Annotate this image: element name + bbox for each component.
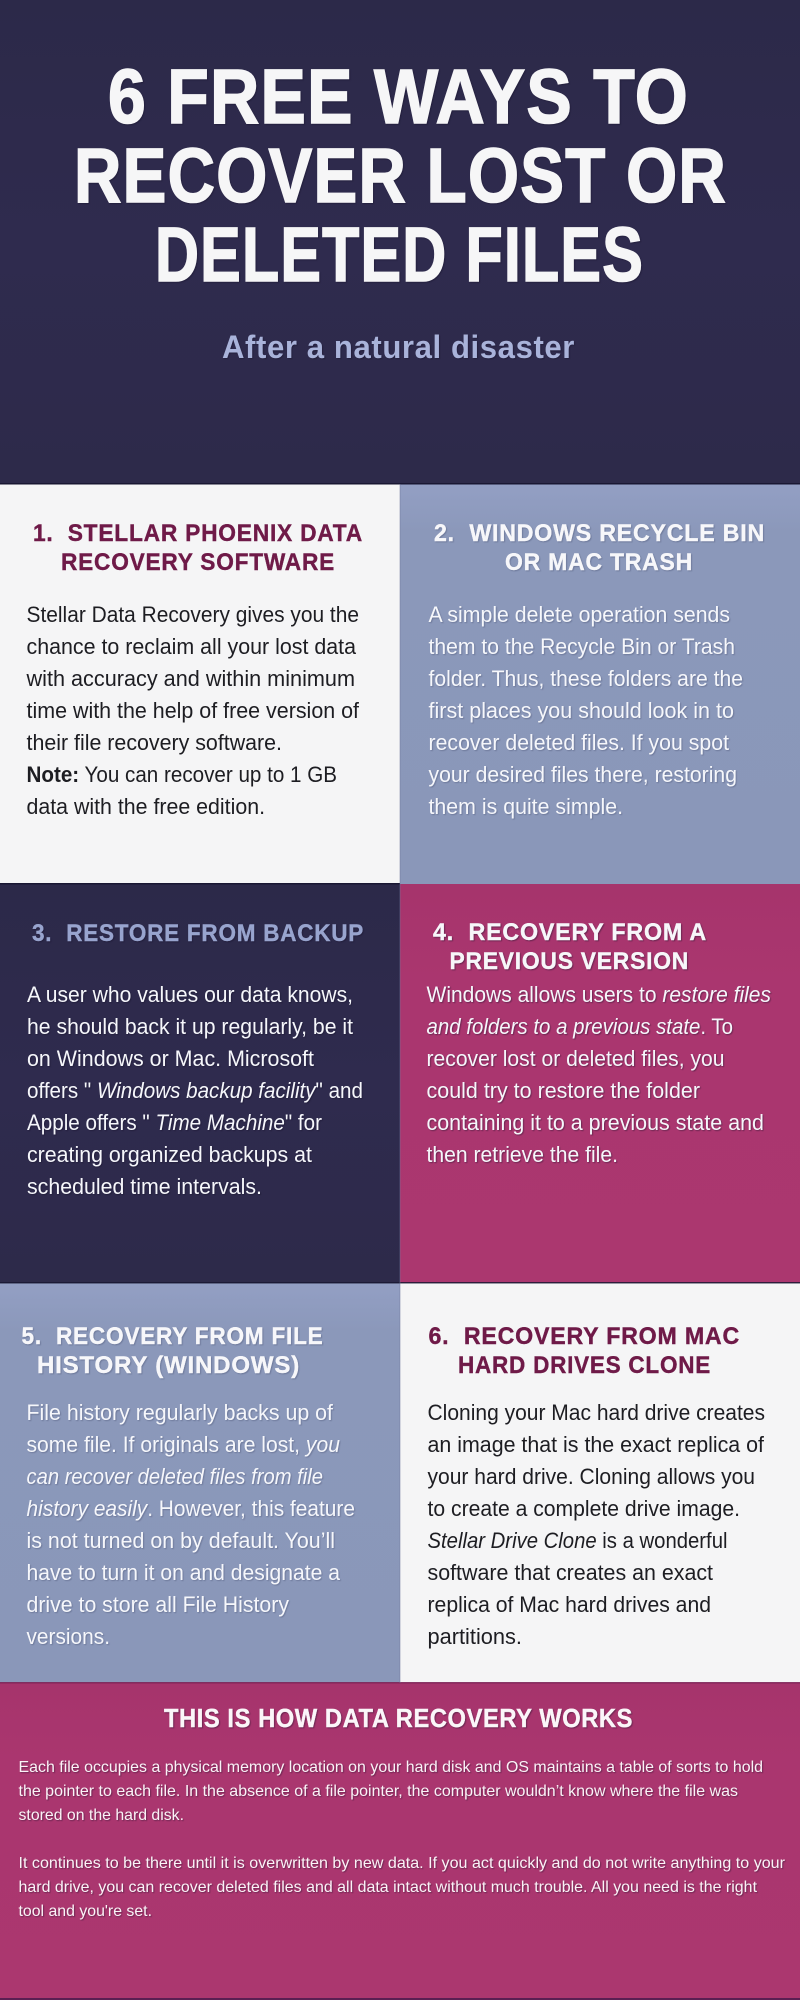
title: 6 FREE WAYS TO <box>108 54 689 140</box>
heading: 5 <box>22 1323 324 1379</box>
text: 5 body: history easily. However, this feature <box>26 1496 355 1521</box>
panel: how data recovery works <box>0 1683 800 2000</box>
heading: 6: HARD DRIVES CLONE <box>458 1352 711 1379</box>
heading: 4: PREVIOUS VERSION <box>450 948 689 975</box>
text: 6 body: an image that is the exact replica of <box>428 1432 765 1457</box>
text: 6 body <box>428 1400 765 1649</box>
text: 5 body: File history regularly backs up of <box>26 1400 334 1425</box>
heading: 6: 6. RECOVERY FROM MAC <box>428 1323 740 1350</box>
text: 6 body: partitions. <box>428 1624 522 1649</box>
text: 2 body: A simple delete operation sends <box>428 602 730 627</box>
heading: 3: 3. RESTORE FROM BACKUP <box>32 920 364 947</box>
heading: 5: 5. RECOVERY FROM FILE <box>22 1323 324 1350</box>
heading: 4: 4. RECOVERY FROM A <box>433 919 707 946</box>
text: 6 body: Cloning your Mac hard drive creates <box>428 1400 765 1425</box>
text: 5 body <box>26 1400 355 1649</box>
text: 1 body: Note: You can recover up to 1 GB <box>26 762 337 787</box>
heading: 2: 2. WINDOWS RECYCLE BIN <box>434 520 765 547</box>
text: 1 body: their file recovery software. <box>26 730 282 755</box>
text: 3 body: creating organized backups at <box>27 1142 312 1167</box>
text: 5 body: have to turn it on and designate a <box>26 1560 341 1585</box>
text: 2 body: recover deleted files. If you spot <box>428 730 729 755</box>
panel: 1 Stellar Phoenix <box>0 484 400 884</box>
panel: 2 Recycle Bin <box>400 484 800 884</box>
text: 2 body: your desired files there, restoring <box>428 762 737 787</box>
text: 5 body: is not turned on by default. You’ll <box>26 1528 335 1553</box>
text: 5 body: versions. <box>26 1624 110 1649</box>
heading: 1: 1. STELLAR PHOENIX DATA <box>33 520 363 547</box>
text: 3 body: offers " Windows backup facility" and <box>27 1078 363 1103</box>
text: 6 body: replica of Mac hard drives and <box>428 1592 711 1617</box>
text: 4 body: Windows allows users to restore files <box>426 982 771 1007</box>
panel: 5 File history <box>0 1283 400 1683</box>
text: 3 body: A user who values our data knows, <box>27 982 353 1007</box>
text: 6 body: software that creates an exact <box>428 1560 713 1585</box>
text: 4 body: could try to restore the folder <box>426 1078 700 1103</box>
text: 1 body: chance to reclaim all your lost data <box>26 634 357 659</box>
panel: 4 Previous version <box>400 884 800 1283</box>
text: 6 body: to create a complete drive image. <box>428 1496 740 1521</box>
text: 4 body: then retrieve the file. <box>426 1142 618 1167</box>
subtitle: After a natural disaster <box>222 329 575 365</box>
text: 1 body: Stellar Data Recovery gives you the <box>26 602 359 627</box>
text: 2 body: them to the Recycle Bin or Trash <box>428 634 735 659</box>
heading: 4 <box>433 919 707 975</box>
heading: 1: RECOVERY SOFTWARE <box>61 549 335 576</box>
text: paragraph 1: Each file occupies a physical memory location on your hard disk and OS maintains a table of sorts to hold <box>18 1759 763 1776</box>
text: 5 body: some file. If originals are lost, you <box>26 1432 340 1457</box>
text: 6 body: Stellar Drive Clone is a wonderful <box>428 1528 728 1553</box>
panel: 6 Mac clone <box>400 1283 800 1683</box>
text: 4 body: containing it to a previous state and <box>426 1110 764 1135</box>
text: 4 body: and folders to a previous state. To <box>426 1014 733 1039</box>
text: 6 body: your hard drive. Cloning allows you <box>428 1464 755 1489</box>
heading: 6 <box>428 1323 740 1379</box>
text: 1 body: with accuracy and within minimum <box>26 666 355 691</box>
text: 3 body <box>27 982 363 1199</box>
heading: 5: HISTORY (WINDOWS) <box>37 1352 300 1379</box>
heading: 2 <box>434 520 765 576</box>
title <box>74 54 727 298</box>
heading: 2: OR MAC TRASH <box>505 549 693 576</box>
text: paragraph 2: hard drive, you can recover deleted files and all data intact without much trouble. All you need is the right <box>18 1879 758 1896</box>
text: 5 body: drive to store all File History <box>26 1592 289 1617</box>
text: paragraph 1: the pointer to each file. In the absence of a file pointer, the computer wouldn’t know where the file was <box>18 1783 738 1800</box>
title: DELETED FILES <box>155 212 644 298</box>
text: 2 body <box>428 602 743 819</box>
text: 2 body: first places you should look in to <box>428 698 734 723</box>
text: paragraph 1 <box>18 1759 763 1824</box>
text: paragraph 2: tool and you're set. <box>18 1903 152 1920</box>
text: 2 body: them is quite simple. <box>428 794 623 819</box>
text: 3 body: he should back it up regularly, be it <box>27 1014 353 1039</box>
heading: 1 <box>33 520 363 576</box>
text: 1 body <box>26 602 360 819</box>
text: 4 body <box>426 982 771 1167</box>
panel: header <box>0 0 800 484</box>
text: 4 body: recover lost or deleted files, you <box>426 1046 724 1071</box>
panel: 3 Restore from backup <box>0 884 400 1283</box>
text: 3 body: on Windows or Mac. Microsoft <box>27 1046 314 1071</box>
text: 2 body: folder. Thus, these folders are the <box>428 666 743 691</box>
text: paragraph 2: It continues to be there until it is overwritten by new data. If you act quickly and do not write anything to your <box>18 1855 786 1872</box>
text: 1 body: data with the free edition. <box>26 794 265 819</box>
text: paragraph 2 <box>18 1855 786 1920</box>
text: 1 body: time with the help of free version of <box>26 698 360 723</box>
text: 5 body: can recover deleted files from file <box>26 1464 323 1489</box>
text: paragraph 1: stored on the hard disk. <box>18 1807 184 1824</box>
text: 3 body: Apple offers " Time Machine" for <box>27 1110 322 1135</box>
heading: how data recovery works: THIS IS HOW DATA RECOVERY WORKS <box>164 1703 633 1733</box>
text: 3 body: scheduled time intervals. <box>27 1174 262 1199</box>
